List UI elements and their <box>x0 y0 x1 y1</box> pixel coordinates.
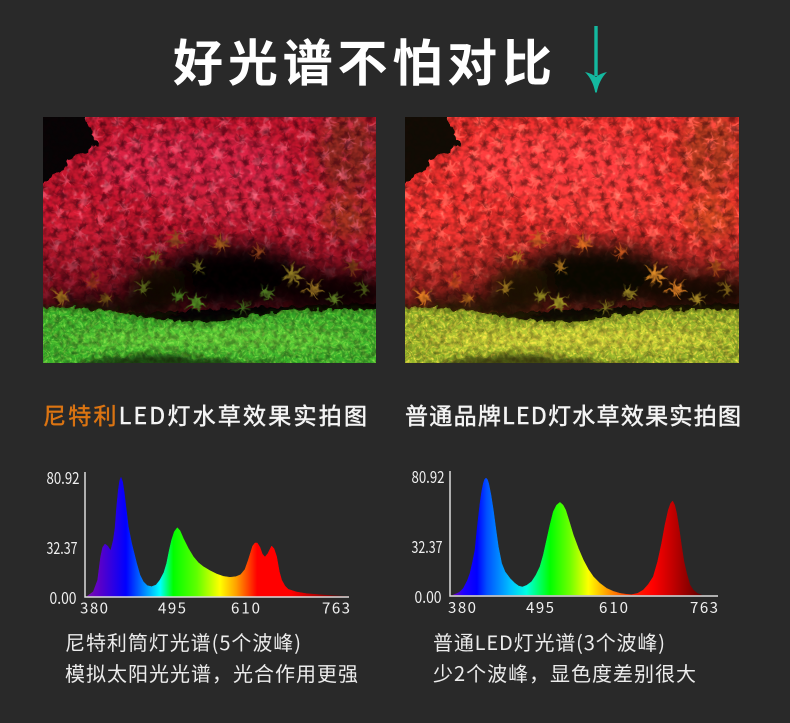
spectrum area <box>87 477 349 597</box>
chart: ordinary LED spectrum, 3 peaks <box>412 464 718 618</box>
text block: Nitely spectrum description <box>65 627 358 687</box>
x-axis labels: 380 <box>448 597 476 618</box>
icon: teal down arrow <box>585 26 607 92</box>
spectrum area <box>453 478 702 595</box>
caption: ordinary brand photo: 普通品牌LED灯水草效果实拍图 <box>405 397 741 431</box>
x-axis labels: 380 <box>80 598 108 618</box>
text block: ordinary LED spectrum description: 普通LED灯光谱(3个波峰) <box>433 627 665 656</box>
x-axis labels <box>80 598 350 618</box>
title: 好光谱不怕对比 <box>173 24 552 96</box>
y-axis labels: 0.00 <box>414 584 442 608</box>
chart: Nitely spectrum, 5 peaks <box>46 465 350 618</box>
text block: Nitely spectrum description: 尼特利筒灯光谱(5个波峰) <box>65 627 301 656</box>
x-axis labels: 610 <box>599 597 628 618</box>
y-axis labels: 32.37 <box>46 535 78 559</box>
x-axis labels: 763 <box>322 598 350 618</box>
y-axis labels: 80.92 <box>46 465 80 489</box>
photo: Nitely LED aquarium plants <box>28 102 395 377</box>
y-axis labels: 32.37 <box>412 534 443 558</box>
text block: Nitely spectrum description: 模拟太阳光光谱，光合作用更强 <box>65 658 358 687</box>
y-axis labels <box>412 464 445 608</box>
text block: ordinary LED spectrum description: 少2个波峰，显色度差别很大 <box>433 658 696 687</box>
x-axis labels: 495 <box>526 597 554 618</box>
axes <box>450 471 718 596</box>
y-axis labels <box>46 465 80 609</box>
axes <box>85 472 349 597</box>
x-axis labels: 610 <box>231 598 260 618</box>
text block: ordinary LED spectrum description <box>433 627 696 687</box>
caption: Nitely photo: 尼特利LED灯水草效果实拍图 <box>43 397 367 431</box>
y-axis labels: 0.00 <box>50 585 77 609</box>
x-axis labels: 495 <box>158 598 186 618</box>
x-axis labels: 763 <box>690 597 718 618</box>
x-axis labels <box>448 597 718 618</box>
y-axis labels: 80.92 <box>412 464 445 488</box>
photo: ordinary LED aquarium plants <box>390 102 758 377</box>
